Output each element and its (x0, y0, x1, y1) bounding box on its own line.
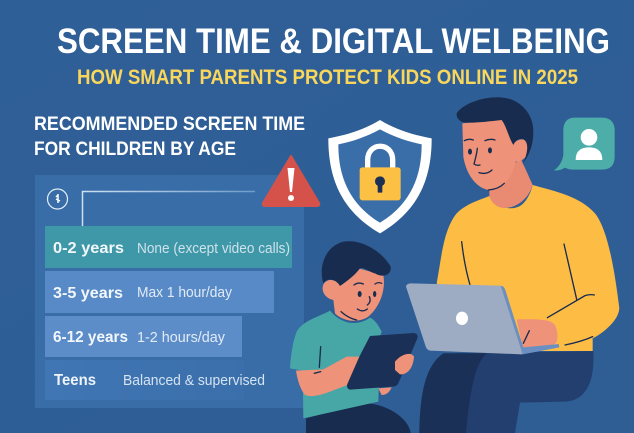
child face details (341, 283, 382, 320)
father face details (464, 139, 504, 190)
row: 6-12 years (45, 316, 242, 357)
illustration: father (406, 97, 619, 433)
row: 6-12 years: 6-12 years (53, 329, 128, 346)
icon: warning triangle (263, 156, 319, 206)
child right hand (395, 354, 414, 374)
section heading (34, 114, 305, 160)
icon: clock (48, 189, 68, 209)
illustration: child (290, 241, 418, 433)
father sweater (437, 185, 619, 351)
tablet (347, 333, 418, 390)
father neck (489, 158, 533, 208)
row: 0-2 years (45, 226, 292, 268)
section heading: FOR CHILDREN BY AGE (34, 139, 236, 160)
row: teens: Teens (54, 372, 96, 389)
child trousers (306, 403, 411, 433)
chart axis (82, 192, 255, 226)
section heading: RECOMMENDED SCREEN TIME (34, 114, 305, 135)
subtitle: HOW SMART PARENTS PROTECT KIDS ONLINE IN 2025 (77, 66, 578, 89)
panel: screen time by age (35, 175, 304, 408)
child shirt (290, 311, 382, 418)
father hand (517, 319, 557, 350)
child arm (296, 357, 377, 396)
father hair (457, 97, 533, 165)
father trousers (419, 351, 594, 433)
row: 0-2 years: None (except video calls) (137, 241, 290, 257)
child hair (322, 241, 391, 286)
laptop (406, 283, 524, 354)
row: 6-12 years: 1-2 hours/day (137, 330, 226, 346)
row: 0-2 years: 0-2 years (53, 240, 124, 257)
sweater fold lines (462, 242, 594, 345)
child head (323, 268, 384, 321)
row: teens: Balanced & supervised (123, 373, 265, 389)
icon: chat bubble (554, 118, 615, 170)
row: teens (45, 360, 265, 400)
row: 3-5 years (45, 271, 274, 313)
icon: security shield (328, 120, 432, 233)
row: 3-5 years: Max 1 hour/day (137, 285, 233, 301)
father head (462, 118, 517, 190)
row: 3-5 years: 3-5 years (53, 285, 123, 302)
